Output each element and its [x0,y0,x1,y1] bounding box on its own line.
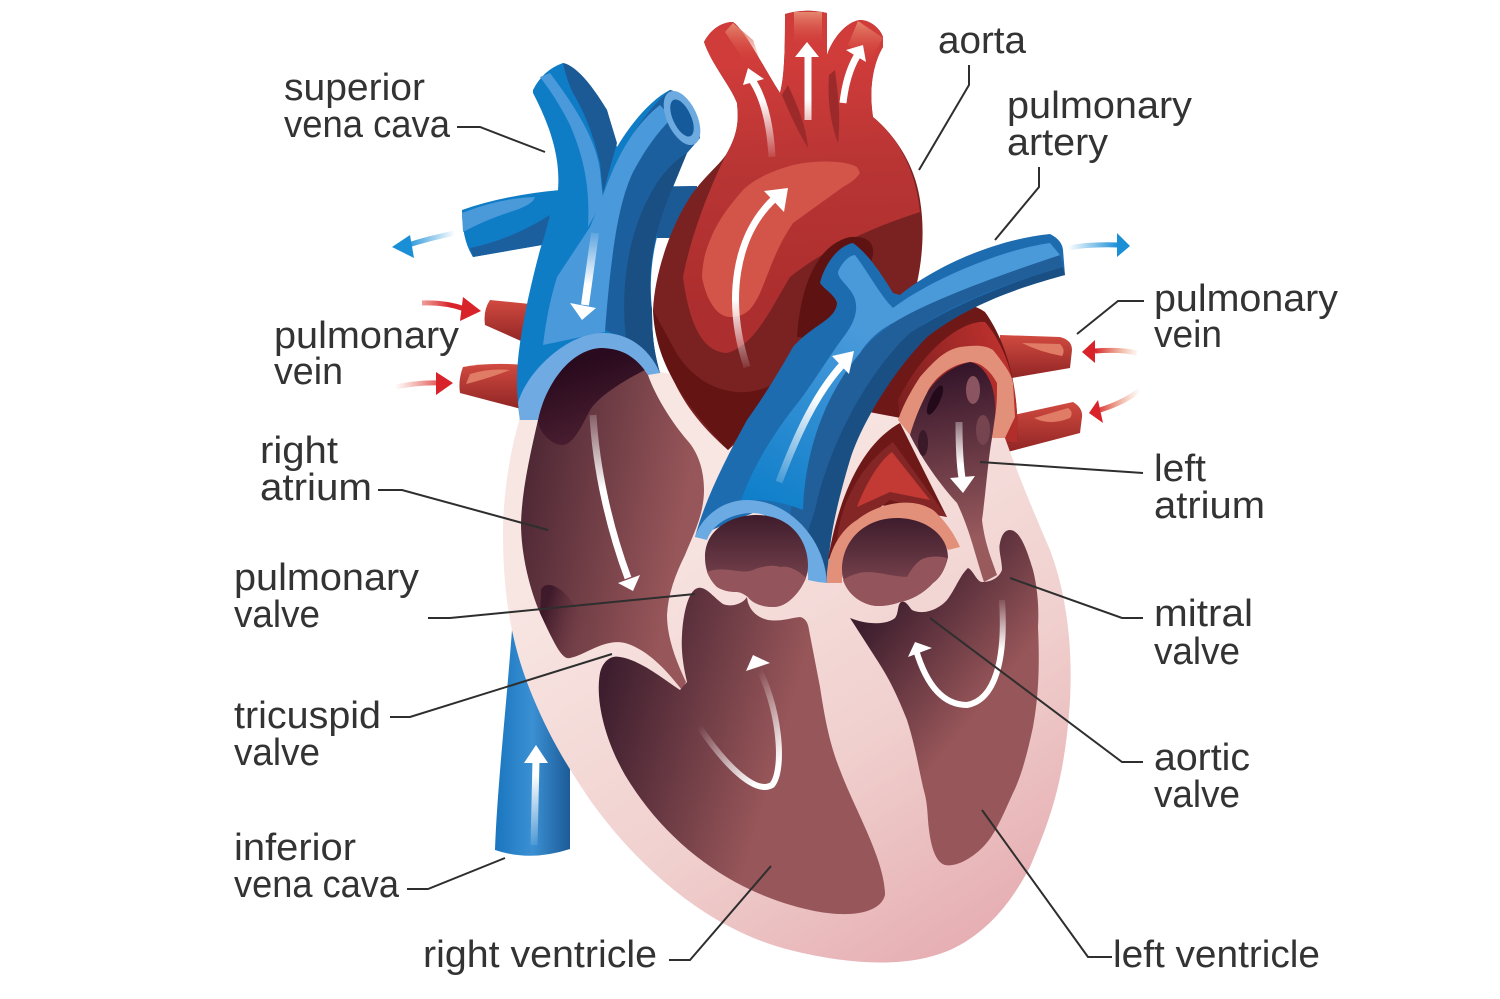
arrows: oxygenated blood from left veins [395,297,481,395]
label: pulmonary vein, left [274,315,459,393]
right ventricle chamber [599,588,885,914]
label: mitral valve [1154,593,1253,673]
aorta [653,11,923,450]
pulmonary artery branch, left [462,186,697,257]
label: pulmonary valve: pulmonary [234,557,419,599]
label: pulmonary vein, right: vein [1154,314,1222,356]
label: inferior vena cava [234,827,400,906]
pulmonary artery [695,234,1065,583]
label: left atrium [1154,448,1265,527]
label: aortic valve: aortic [1154,737,1250,779]
label: pulmonary valve [234,557,419,636]
label: tricuspid valve [234,695,381,774]
label: pulmonary vein, left: vein [274,351,343,393]
label: aorta: aorta [938,20,1027,62]
label: pulmonary artery: pulmonary [1007,85,1192,127]
label: aortic valve: valve [1154,774,1240,816]
white arrow in right atrium [593,415,640,591]
label: tricuspid valve: valve [234,732,320,774]
label: left atrium: left [1154,448,1206,490]
pulmonary veins, left [459,300,530,410]
inferior vena cava [495,630,570,856]
left ventricle chamber [850,530,1039,865]
label: right atrium: right [260,430,338,472]
label: right ventricle: right ventricle [423,934,657,976]
label: pulmonary valve: valve [234,594,320,636]
dark recess under the aorta [797,237,873,340]
left atrium rim [898,346,1015,438]
superior vena cava [517,63,700,420]
left atrium chamber [910,362,997,582]
right atrium chamber [521,348,704,690]
aorta root and triangle [828,423,947,560]
white arrows in aorta [736,42,866,367]
label: pulmonary vein, right: pulmonary [1154,278,1338,320]
label: pulmonary artery: artery [1007,122,1108,164]
white arrow in right ventricle [698,655,779,787]
label: left atrium: atrium [1154,485,1265,527]
label: inferior vena cava: vena cava [234,864,400,906]
label: pulmonary artery [1007,85,1192,164]
label: right atrium [260,430,372,509]
white arrow in pulmonary artery [779,351,854,482]
label: pulmonary vein, right [1154,278,1338,356]
label: superior vena cava: vena cava [284,104,451,146]
white arrow in superior vena cava [570,233,596,320]
label: superior vena cava: superior [284,67,425,109]
pulmonary artery rim and valve opening [695,500,827,607]
superior vena cava opening [656,85,708,151]
label: inferior vena cava: inferior [234,827,356,869]
white arrow in left atrium [950,422,975,493]
label: aortic valve [1154,737,1250,816]
label: tricuspid valve: tricuspid [234,695,381,737]
label: mitral valve: valve [1154,631,1240,673]
label: right atrium: atrium [260,467,372,509]
label: superior vena cava [284,67,451,146]
label: left ventricle: left ventricle [1113,934,1320,976]
leader lines [378,65,1144,960]
superior vena cava rim [518,333,660,420]
aortic rim and valve opening [827,503,960,606]
pulmonary veins, right [1000,335,1082,454]
white arrow in left ventricle [908,600,1003,705]
arrows: oxygenated blood from right veins [1082,340,1140,423]
white arrow in inferior vena cava [524,745,548,845]
label: pulmonary vein, left: pulmonary [274,315,459,357]
arrow: blood to left lung [392,233,455,258]
label: mitral valve: mitral [1154,593,1253,635]
heart wall [503,370,1071,962]
arrow: blood to right lung [1068,233,1130,257]
left atrium back wall [860,303,1017,445]
